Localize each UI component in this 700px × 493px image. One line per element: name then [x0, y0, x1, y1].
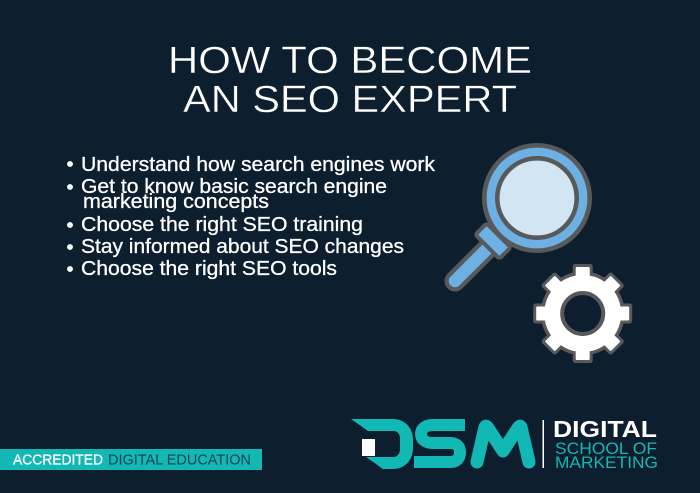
icon: gear — [533, 264, 632, 363]
bullet list: Choose the right SEO tools — [81, 257, 337, 280]
bullet list: Choose the right SEO training — [81, 213, 363, 236]
bullet list — [67, 153, 436, 280]
logo: DSM Digital School of Marketing — [351, 416, 658, 472]
banner: accredited digital education — [0, 449, 262, 470]
logo wordmark: MARKETING — [555, 453, 658, 472]
logo letter M — [477, 426, 529, 462]
title — [168, 40, 532, 121]
title: AN SEO EXPERT — [183, 79, 517, 121]
logo wordmark — [553, 416, 658, 472]
icon: magnifying glass — [455, 145, 590, 281]
logo letter S — [414, 425, 465, 462]
banner: accredited digital education: ACCREDITED — [13, 452, 103, 468]
title: HOW TO BECOME — [168, 40, 532, 82]
bullet list: marketing concepts — [83, 190, 269, 213]
bullet list: Stay informed about SEO changes — [81, 235, 404, 258]
logo wordmark: SCHOOL OF — [555, 439, 657, 458]
logo divider — [542, 420, 544, 468]
bullet list: Get to know basic search engine — [81, 175, 387, 198]
bullet list: Understand how search engines work — [81, 153, 436, 176]
logo letter D — [351, 419, 413, 469]
logo white square — [362, 439, 375, 456]
logo wordmark: DIGITAL — [553, 416, 657, 442]
banner: accredited digital education: DIGITAL EDUCATION — [108, 452, 251, 468]
